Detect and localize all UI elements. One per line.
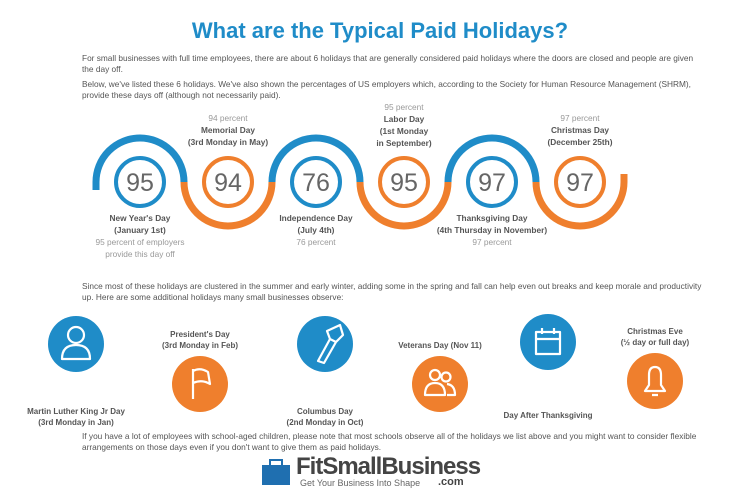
label: new year: New Year's Day xyxy=(110,213,170,223)
text: Columbus Day xyxy=(297,407,353,416)
label: memorial day xyxy=(188,113,268,147)
title: What are the Typical Paid Holidays? xyxy=(192,18,568,43)
wave chart: 97 xyxy=(478,169,506,197)
label: memorial day: Memorial Day xyxy=(201,125,255,135)
label: christmas: (December 25th) xyxy=(547,137,613,147)
wave chart: 94 xyxy=(214,169,242,197)
label: christmas xyxy=(547,113,613,147)
text: Day After Thanksgiving xyxy=(503,411,593,420)
label: new year: provide this day off xyxy=(105,249,175,259)
flashlight xyxy=(318,325,343,363)
label: labor day: in September) xyxy=(376,138,432,148)
label: labor day: 95 percent xyxy=(384,102,424,112)
intro text: For small businesses with full time employees, there are about 6 holidays that are generally considered paid holidays where the doors are closed and people are given the day off. xyxy=(82,53,693,74)
logo: .com xyxy=(438,476,464,488)
label: independence: 76 percent xyxy=(296,237,336,247)
bell xyxy=(645,367,665,395)
calendar xyxy=(536,332,560,354)
icon labels xyxy=(27,407,125,427)
label: thanksgiving: 97 percent xyxy=(472,237,512,247)
label: new year: 95 percent of employers xyxy=(95,237,185,247)
label: new year: (January 1st) xyxy=(114,225,166,235)
flag xyxy=(193,369,210,399)
label: labor day xyxy=(376,102,432,148)
label: memorial day: (3rd Monday in May) xyxy=(188,137,268,147)
logo xyxy=(262,453,480,488)
text: (½ day or full day) xyxy=(621,338,689,347)
text: President's Day xyxy=(170,330,230,339)
label: thanksgiving: (4th Thursday in November) xyxy=(437,225,547,235)
logo: Get Your Business Into Shape xyxy=(300,478,420,488)
label: thanksgiving: Thanksgiving Day xyxy=(456,213,528,223)
icon labels: Martin Luther King Jr Day xyxy=(27,407,125,416)
people xyxy=(430,370,440,380)
text: Veterans Day (Nov 11) xyxy=(398,341,482,350)
text: Christmas Eve xyxy=(627,327,683,336)
logo: FitSmallBusiness xyxy=(296,453,480,480)
wave chart: 95 xyxy=(126,169,154,197)
intro text xyxy=(82,53,693,100)
label: independence: (July 4th) xyxy=(298,225,334,235)
label: independence: Independence Day xyxy=(279,213,353,223)
text: (3rd Monday in Feb) xyxy=(162,341,238,350)
bottom text: If you have a lot of employees with school-aged children, please note that most schools observe all of the holidays we list above and you might want to consider flexible arrangements on those days even if you don't want to give them as paid holidays. xyxy=(82,431,696,452)
person xyxy=(68,327,84,343)
label: labor day: (1st Monday xyxy=(380,126,428,136)
wave chart: 97 xyxy=(566,169,594,197)
wave chart: 76 xyxy=(302,169,330,197)
label: labor day: Labor Day xyxy=(384,114,424,124)
label: memorial day: 94 percent xyxy=(208,113,248,123)
text: (2nd Monday in Oct) xyxy=(287,418,363,427)
icon labels: (3rd Monday in Jan) xyxy=(38,418,114,427)
label: new year xyxy=(95,213,185,259)
wave chart: 95 xyxy=(390,169,418,197)
label: christmas: Christmas Day xyxy=(551,125,609,135)
intro text: Below, we've listed these 6 holidays. We've also shown the percentages of US employers which, according to the Society for Human Resource Management (SHRM), provide these days off (although not necessarily paid). xyxy=(82,79,691,100)
label: christmas: 97 percent xyxy=(560,113,600,123)
middle text: Since most of these holidays are clustered in the summer and early winter, adding some in the spring and fall can help even out breaks and keep morale and productivity up. Here are some additional holidays many small businesses observe: xyxy=(82,281,701,302)
label: thanksgiving xyxy=(437,213,547,247)
label: independence xyxy=(279,213,353,247)
